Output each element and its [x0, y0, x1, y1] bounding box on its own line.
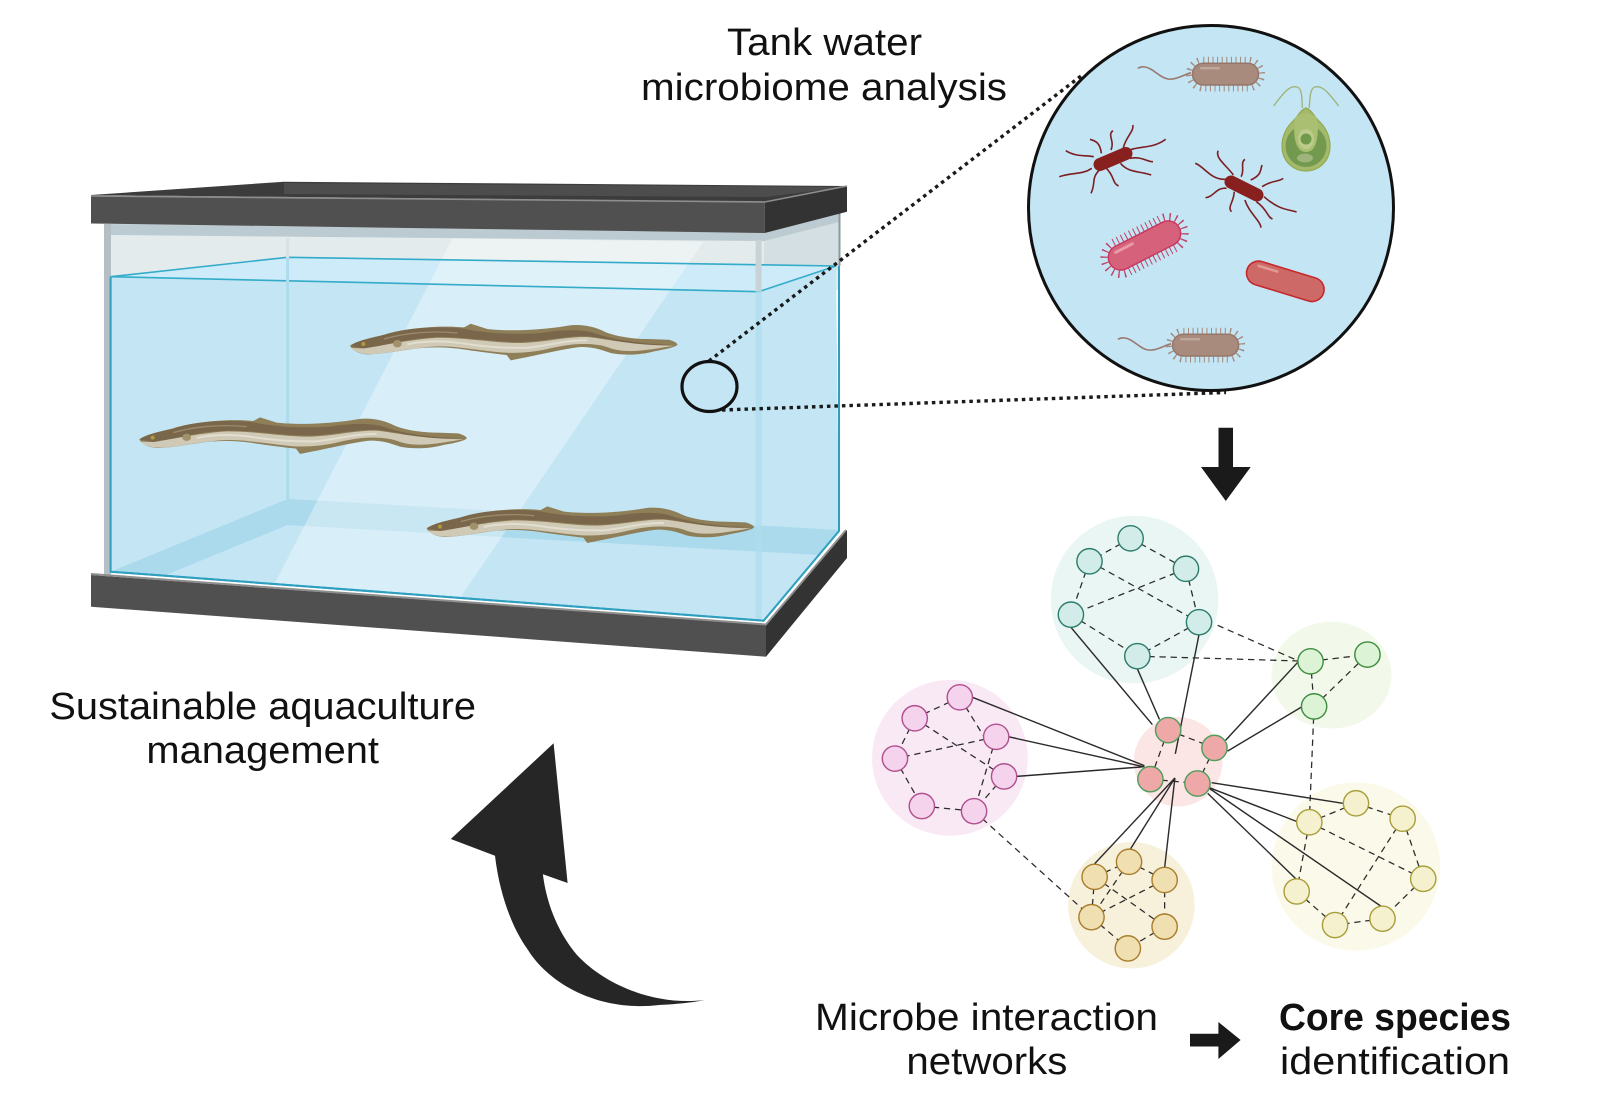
pink bacterium: [1104, 217, 1185, 274]
curved return arrow: [451, 743, 705, 1006]
right glass edge: [838, 212, 840, 266]
teal nodes: [1058, 526, 1212, 669]
label: microbe interaction networks: [815, 997, 1158, 1083]
core cluster background: [1134, 717, 1222, 806]
label: microbe interaction networks: Microbe interaction: [815, 997, 1158, 1039]
label: core species identification: identification: [1280, 1041, 1510, 1083]
orange cluster background: [1068, 842, 1195, 969]
label: tank water microbiome analysis: [641, 22, 1007, 109]
lid top: [91, 182, 847, 202]
dark red bacterium right: [1195, 151, 1297, 228]
green cluster background: [1271, 622, 1392, 729]
lid inner rim: [284, 183, 847, 197]
yellow nodes: [1284, 791, 1436, 938]
tank right side glass: [764, 212, 839, 290]
arrow right: [1190, 1022, 1241, 1059]
yellow cluster background: [1272, 782, 1440, 951]
orange nodes: [1079, 849, 1177, 961]
label: tank water microbiome analysis: Tank water: [727, 22, 922, 64]
label: core species identification: [1279, 997, 1511, 1083]
brown bacterium top: [1138, 63, 1258, 85]
lid right side: [765, 186, 847, 233]
water surface: [111, 257, 836, 292]
label: tank water microbiome analysis: microbiome analysis: [641, 67, 1007, 109]
label: sustainable aquaculture management: [49, 686, 476, 772]
brown bacterium bottom: [1118, 334, 1239, 356]
red bacterium: [1244, 258, 1327, 304]
solid core links: [972, 627, 1382, 907]
eel bottom: [427, 506, 754, 543]
dashed network links: [895, 538, 1423, 948]
green alga: [1274, 87, 1339, 171]
label: sustainable aquaculture management: management: [146, 730, 379, 772]
aquarium tank: [91, 182, 847, 657]
eel middle: [139, 417, 467, 454]
circle background: [1028, 26, 1394, 390]
base water edge: [111, 572, 764, 621]
microbiome circle: [1028, 26, 1394, 390]
network diagram: [872, 516, 1440, 969]
label: microbe interaction networks: networks: [906, 1041, 1067, 1083]
lid front: [91, 195, 765, 233]
water body: [111, 257, 839, 621]
water surface lines: [111, 257, 836, 292]
lid highlight: [91, 186, 847, 202]
tank left glass edge: [104, 224, 111, 576]
arrow down: [1201, 428, 1251, 501]
teal cluster background: [1051, 516, 1218, 683]
label: core species identification: Core species: [1279, 997, 1511, 1039]
tank corner edges: [288, 238, 759, 620]
label: sustainable aquaculture management: Sustainable aquaculture: [49, 686, 476, 728]
tank rear glass above water: [104, 212, 839, 290]
tank floor back band: [111, 499, 839, 575]
sampling circle: [682, 362, 737, 412]
pink cluster background: [872, 680, 1028, 836]
zoom dotted lines: [709, 76, 1226, 410]
water outline: [111, 266, 839, 621]
glass reflection: [274, 238, 704, 598]
core nodes: [1138, 717, 1227, 796]
eel top: [350, 324, 677, 360]
base highlight: [91, 530, 846, 624]
green nodes: [1298, 642, 1380, 719]
base front: [91, 575, 766, 657]
dark red bacterium left: [1059, 125, 1166, 193]
lid shadow band: [104, 212, 839, 241]
pink nodes: [882, 685, 1017, 824]
base right side: [766, 530, 847, 657]
